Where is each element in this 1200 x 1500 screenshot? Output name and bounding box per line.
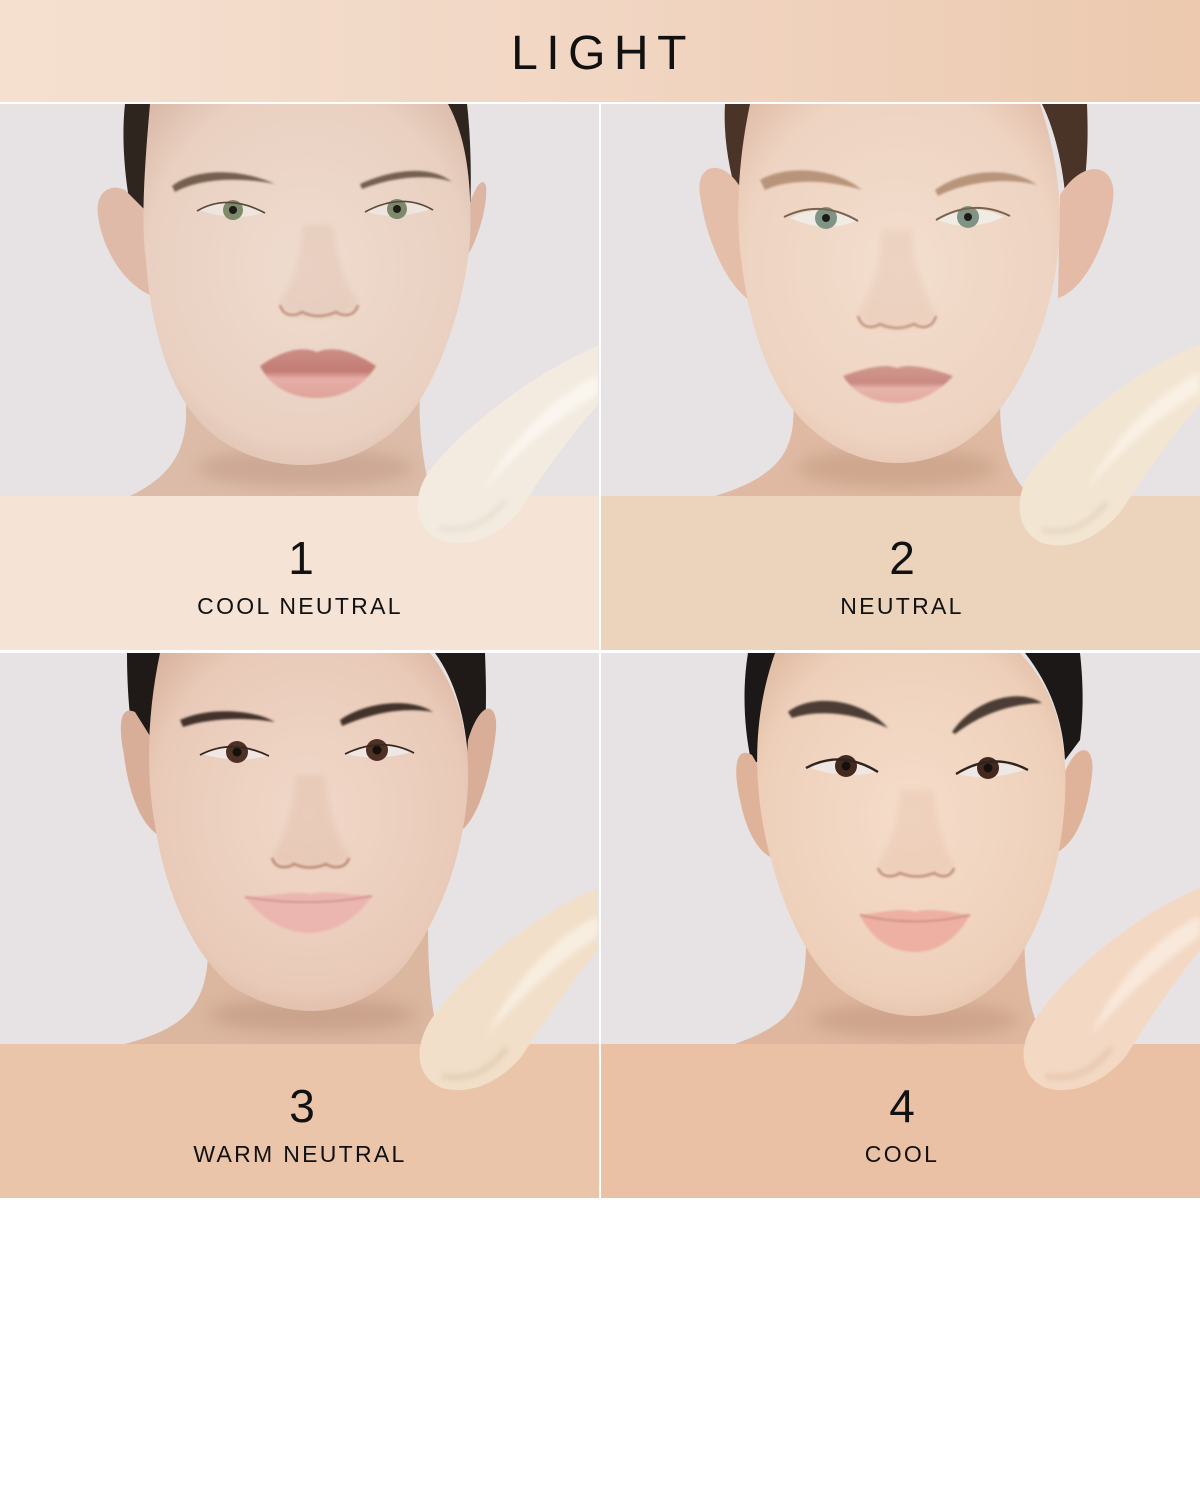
label: neutral: NEUTRAL bbox=[840, 593, 964, 619]
header band: LIGHT: LIGHT bbox=[511, 27, 695, 80]
portrait 4 bbox=[735, 653, 1092, 1044]
portrait 3 bbox=[121, 653, 496, 1044]
number 3: 3 bbox=[289, 1080, 315, 1132]
portrait 1 bbox=[98, 104, 486, 496]
label: warm neutral: WARM NEUTRAL bbox=[193, 1141, 407, 1167]
number 1: 1 bbox=[288, 532, 314, 584]
label: cool neutral: COOL NEUTRAL bbox=[197, 593, 403, 619]
swatch 1 bbox=[418, 346, 598, 543]
header band: LIGHT bbox=[0, 0, 1200, 102]
label: cool: COOL bbox=[865, 1141, 939, 1167]
swatch 2 bbox=[1020, 344, 1200, 545]
number 2: 2 bbox=[889, 532, 915, 584]
swatch 4 bbox=[1024, 888, 1200, 1090]
number 4: 4 bbox=[889, 1080, 915, 1132]
portrait 2 bbox=[699, 104, 1114, 496]
panel 3: warm neutral bbox=[0, 653, 599, 1198]
swatch 3 bbox=[420, 888, 598, 1090]
panel 1: cool neutral bbox=[0, 104, 599, 650]
panel 4: cool bbox=[601, 653, 1200, 1198]
panel 2: neutral bbox=[601, 104, 1200, 650]
